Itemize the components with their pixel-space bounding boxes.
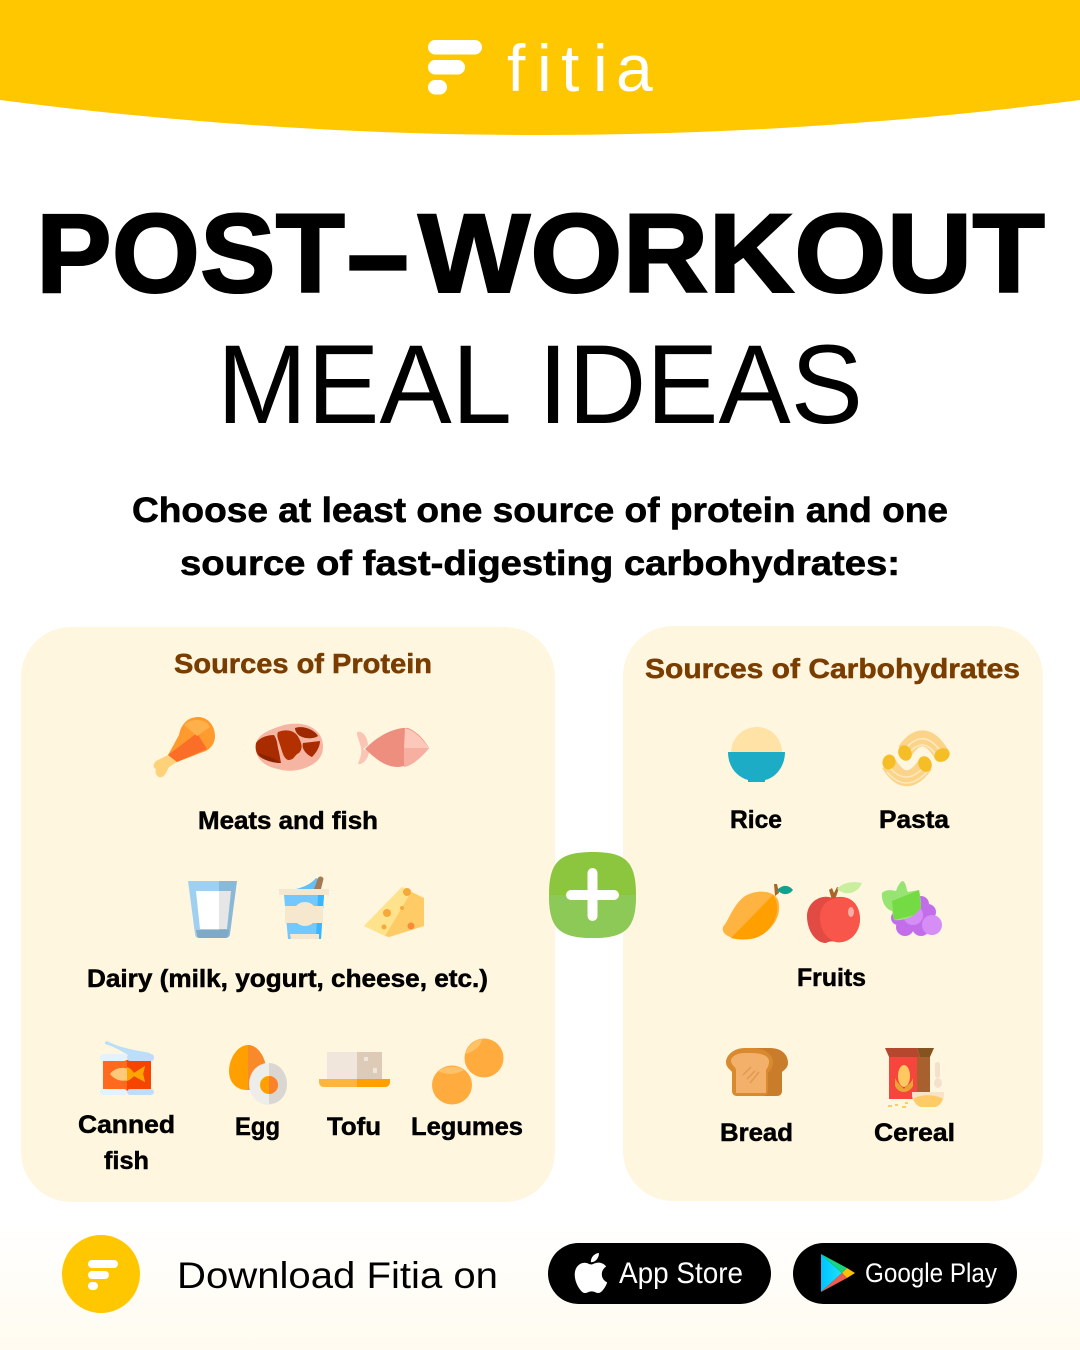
download text: Download Fitia on bbox=[177, 1255, 498, 1296]
title: WORKOUT bbox=[418, 191, 1045, 316]
heading: sources of protein: Sources of Protein bbox=[174, 648, 432, 679]
icon: grapes bbox=[882, 881, 942, 936]
button: app store bbox=[548, 1243, 771, 1304]
label: egg: Egg bbox=[235, 1113, 280, 1141]
icon: legumes bbox=[432, 1038, 504, 1104]
title: - bbox=[343, 191, 413, 316]
subtitle bbox=[132, 491, 948, 583]
icon: yogurt bbox=[279, 877, 329, 939]
label: fruits: Fruits bbox=[797, 964, 866, 992]
icon: bread bbox=[726, 1048, 788, 1096]
icon: apple bbox=[807, 882, 862, 943]
label: app store: App Store bbox=[619, 1257, 743, 1290]
label: canned fish: Canned bbox=[78, 1111, 175, 1139]
icon: play triangle bbox=[821, 1254, 855, 1292]
icon: tofu bbox=[319, 1052, 390, 1087]
label: google play: Google Play bbox=[865, 1258, 997, 1288]
heading: sources of carbohydrates: Sources of Carbohydrates bbox=[645, 653, 1020, 684]
icon: egg bbox=[229, 1045, 287, 1105]
icon: fish bbox=[357, 728, 429, 767]
icon: red meat bbox=[256, 724, 323, 771]
subtitle: source of fast-digesting carbohydrates: bbox=[180, 544, 900, 583]
label: cereal: Cereal bbox=[874, 1119, 955, 1147]
panel: sources of protein bbox=[21, 627, 555, 1202]
icon: cheese bbox=[364, 887, 424, 937]
icon: pasta bbox=[881, 738, 952, 783]
icon: cereal bbox=[885, 1048, 944, 1108]
title: POST bbox=[36, 191, 345, 316]
icon: apple logo bbox=[575, 1253, 607, 1293]
label: pasta: Pasta bbox=[879, 806, 950, 834]
icon: chicken drumstick bbox=[154, 717, 215, 777]
logo: fitia bbox=[428, 31, 653, 105]
logo circle: fitia bbox=[62, 1235, 140, 1313]
label: tofu: Tofu bbox=[327, 1113, 381, 1141]
subtitle: Choose at least one source of protein and one bbox=[132, 491, 948, 530]
label: canned fish bbox=[78, 1111, 175, 1175]
label: legumes: Legumes bbox=[411, 1113, 523, 1141]
icon: rice bowl bbox=[728, 727, 785, 782]
title bbox=[36, 191, 1045, 447]
icon: canned fish bbox=[100, 1041, 154, 1095]
icon: mango bbox=[723, 884, 793, 940]
logo: fitia: fitia bbox=[507, 31, 653, 105]
label: dairy: Dairy (milk, yogurt, cheese, etc.) bbox=[87, 965, 488, 993]
icon: glass of milk bbox=[188, 881, 237, 938]
label: rice: Rice bbox=[730, 806, 782, 834]
label: canned fish: fish bbox=[104, 1147, 149, 1175]
label: meats and fish: Meats and fish bbox=[198, 807, 378, 835]
panel: sources of carbohydrates bbox=[623, 626, 1043, 1201]
title: MEAL IDEAS bbox=[217, 322, 863, 447]
header banner bbox=[0, 0, 1080, 135]
button: google play bbox=[793, 1243, 1017, 1304]
icon: plus bbox=[549, 852, 636, 938]
label: bread: Bread bbox=[720, 1119, 793, 1147]
